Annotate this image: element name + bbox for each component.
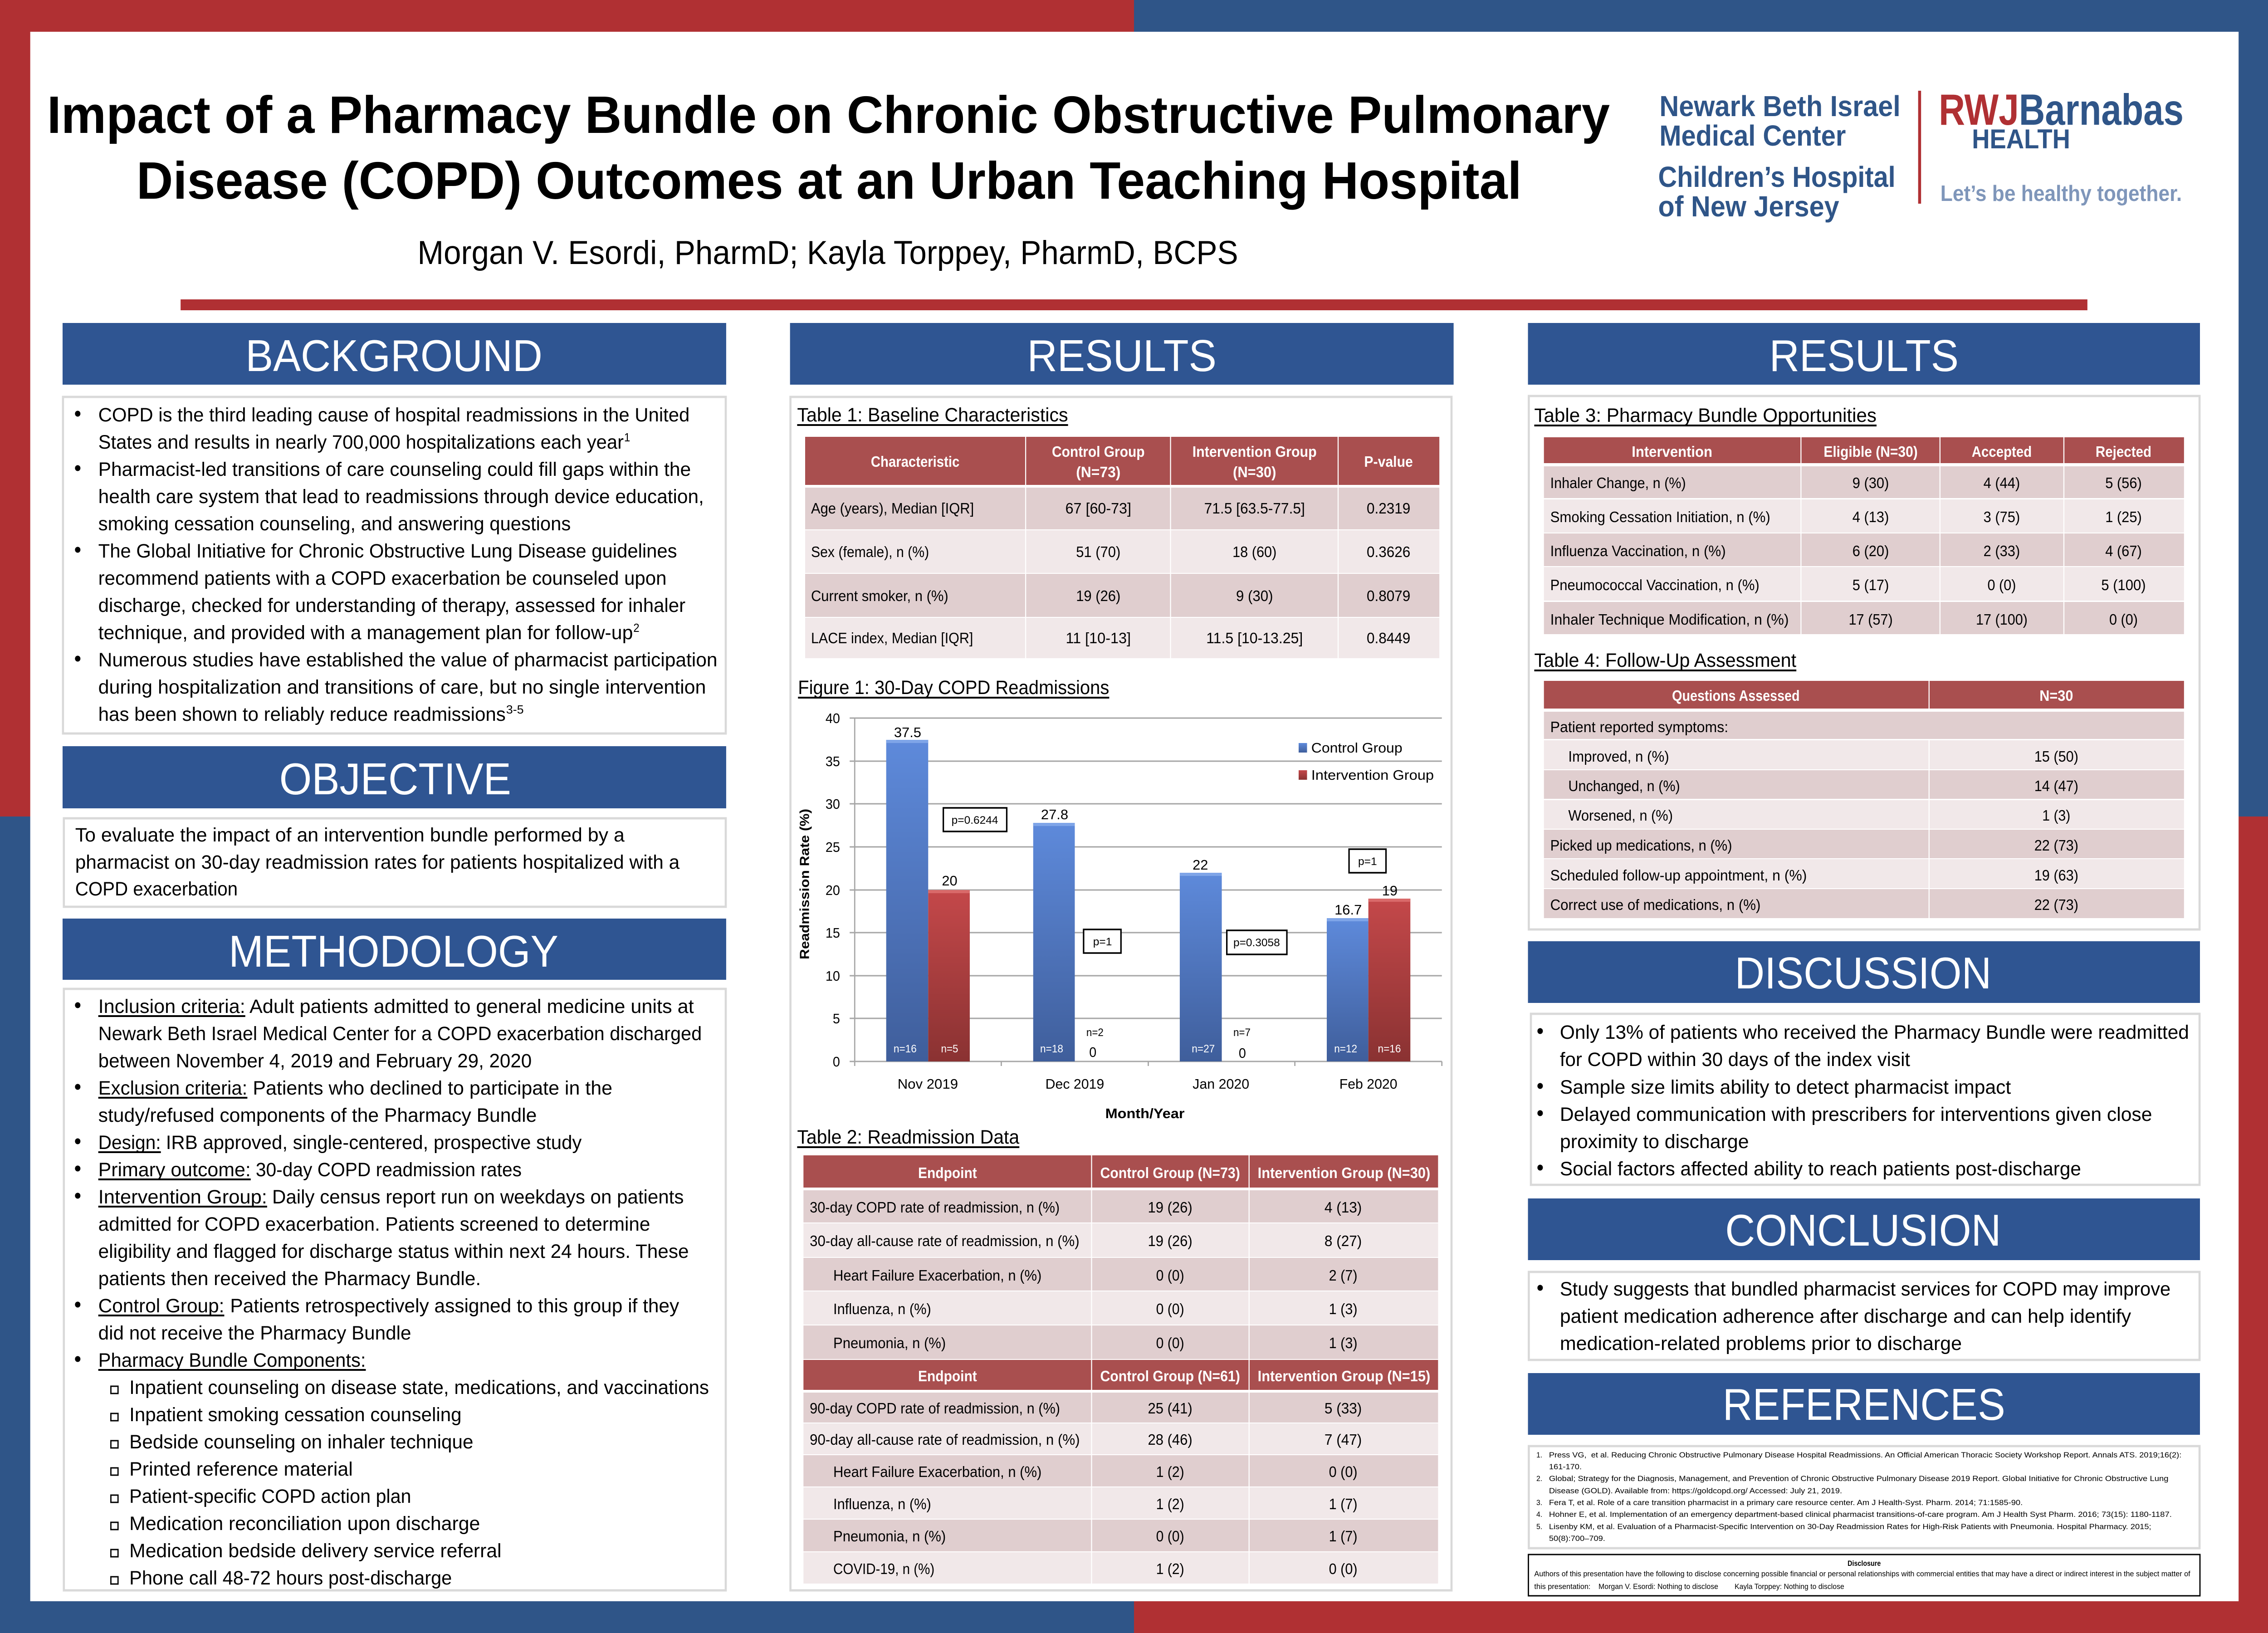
table 2: readmission data: Endpoint [918,1368,977,1384]
table 2: readmission data: 19 (26) [1148,1199,1193,1216]
panel: background: discharge, checked for understanding of therapy, assessed for inhaler [98,594,685,616]
panel: discussion: for COPD within 30 days of the index visit [1560,1048,1911,1070]
panel: references: Fera T, et al. Role of a care transition pharmacist in a primary care resource center. Am J Health-Syst. Pharm. 2014; 71:1585-90. [1549,1498,2023,1507]
p-value callouts [943,808,1386,954]
table 2: readmission data: 1 (2) [1156,1560,1184,1577]
panel: conclusion: patient medication adherence after discharge and can help identify [1560,1305,2131,1327]
p-value callouts: p=0.6244 [952,814,998,826]
y-axis tick labels [826,711,840,1070]
sub-list: pharmacy bundle components: Medication bedside delivery service referral [129,1540,502,1561]
panel: references: 161-170. [1549,1462,1582,1471]
y-axis title: Readmission Rate (%) [797,809,812,959]
logo: RWJBarnabas Health: HEALTH [1972,124,2070,154]
panel: methodology: study/refused components of the Pharmacy Bundle [98,1104,537,1126]
table 2: readmission data: 4 (13) [1325,1199,1362,1216]
heading: background [63,323,726,385]
table 3: pharmacy bundle opportunities: 17 (57) [1848,611,1893,628]
panel: references: 1. [1536,1451,1542,1459]
title [47,85,1610,210]
figure 1 heading: Figure 1: 30-Day COPD Readmissions [798,676,1109,698]
y-axis tick labels: 30 [826,797,840,812]
bars: Dec 2019: 27.8 [1041,807,1068,822]
table 4: follow-up assessment: 22 (73) [2034,837,2078,854]
heading: references [1528,1373,2200,1435]
panel: background: States and results in nearly 700,000 hospitalizations each year [98,431,624,453]
table 1: baseline characteristics: 0.2319 [1367,500,1410,517]
table 1: baseline characteristics: 51 (70) [1076,543,1120,560]
table 3: pharmacy bundle opportunities: 4 (13) [1853,508,1889,525]
table 1: baseline characteristics: 11.5 [10-13.25] [1206,630,1303,646]
heading: methodology: METHODOLOGY [229,927,558,977]
bars: Nov 2019 [886,725,970,1061]
table 2: readmission data: 90-day all-cause rate of readmission, n (%) [810,1431,1080,1448]
sub-list: pharmacy bundle components: Inpatient counseling on disease state, medications, and vaccinations [129,1376,709,1398]
table 4: follow-up assessment: N=30 [2039,687,2073,704]
table 1: baseline characteristics: 0.8079 [1367,587,1410,604]
table 2: readmission data: Endpoint [918,1164,977,1181]
panel: references: Lisenby KM, et al. Evaluation of a Pharmacist-Specific Intervention on 30-Day Readmission Rates for High-Risk Patients with Pneumonia. Hospital Pharmacy. 2015; [1549,1522,2151,1531]
table 3: pharmacy bundle opportunities: Rejected [2096,443,2151,460]
panel: methodology: Patients who declined to participate in the [253,1077,612,1099]
table 4: follow-up assessment [1544,681,2184,918]
panel: background: health care system that lead to readmissions through device education, [98,485,704,507]
x-axis category labels: Jan 2020 [1193,1076,1249,1092]
heading: methodology [63,919,726,980]
heading: results (middle column): RESULTS [1027,332,1217,381]
panel: methodology: Primary outcome: [98,1159,251,1180]
legend [1299,740,1434,783]
disclosure box [1528,1555,2200,1596]
table 2: readmission data: 1 (2) [1156,1463,1184,1480]
table 4: follow-up assessment: 19 (63) [2034,867,2078,884]
p-value callouts: p=1 [1358,855,1377,867]
bars: Jan 2020: n=7 [1233,1026,1251,1038]
table 2: readmission data [803,1155,1438,1584]
sub-list: pharmacy bundle components: Phone call 48-72 hours post-discharge [129,1567,452,1589]
table 1: baseline characteristics: Characteristic [871,453,959,470]
panel: methodology [64,989,726,1590]
panel: objective: pharmacist on 30-day readmission rates for patients hospitalized with a [75,851,680,873]
panel: background: Pharmacist-led transitions of care counseling could fill gaps within the [98,458,691,480]
table 3: pharmacy bundle opportunities: 0 (0) [2109,611,2138,628]
table 2: readmission data: 1 (3) [1329,1335,1358,1351]
logo divider [1918,91,1921,204]
table 1: baseline characteristics: 18 (60) [1232,543,1276,560]
table 2: readmission data: COVID-19, n (%) [833,1560,934,1577]
panel: background: Numerous studies have established the value of pharmacist participation [98,649,717,670]
bars: Nov 2019: n=16 [894,1042,917,1055]
bars: Dec 2019: n=18 [1040,1042,1063,1055]
table 2: readmission data: Heart Failure Exacerbation, n (%) [833,1267,1041,1284]
table 1: baseline characteristics: (N=30) [1233,464,1276,480]
heading: conclusion [1528,1198,2200,1260]
table 2: readmission data: Heart Failure Exacerbation, n (%) [833,1463,1041,1480]
panel: references: Press VG, et al. Reducing Chronic Obstructive Pulmonary Disease Hospital Readmissions. An Official American Thoracic Society Workshop Report. Annals ATS. 2019;16(2): [1549,1451,2181,1459]
y-axis tick labels: 0 [833,1054,840,1070]
sub-list: pharmacy bundle components: Printed reference material [129,1458,353,1480]
disclosure box: Authors of this presentation have the following to disclose concerning possible financial or personal relationships with commercial entities that may have a direct or indirect interest in the subject matter of [1534,1569,2190,1578]
table 1: baseline characteristics: (N=73) [1076,464,1120,480]
table 2: readmission data: 0 (0) [1156,1267,1184,1284]
table 3: pharmacy bundle opportunities: 4 (44) [1984,474,2020,491]
panel: references: 4. [1536,1510,1542,1519]
table 3: pharmacy bundle opportunities: 4 (67) [2105,543,2142,559]
table 4: follow-up assessment: Worsened, n (%) [1568,807,1673,824]
bars: Nov 2019: 37.5 [894,725,921,740]
panel: discussion: Social factors affected ability to reach patients post-discharge [1560,1158,2081,1179]
p-value callouts: p=0.3058 [1233,936,1280,949]
panel: discussion: proximity to discharge [1560,1130,1749,1152]
table 2: readmission data: Pneumonia, n (%) [833,1528,946,1545]
table 3: pharmacy bundle opportunities: Inhaler Change, n (%) [1550,474,1686,491]
panel: references: 50(8):700–709. [1549,1534,1605,1543]
table 2: readmission data: Influenza, n (%) [833,1301,931,1317]
table 2: readmission data: 0 (0) [1156,1528,1184,1545]
panel: background: has been shown to reliably reduce readmissions [98,703,506,725]
table 3 heading: Table 3: Pharmacy Bundle Opportunities [1534,404,1877,426]
bars: Dec 2019 [1033,807,1104,1061]
table 4: follow-up assessment: 14 (47) [2034,777,2078,794]
table 1: baseline characteristics: Current smoker, n (%) [811,587,948,604]
table 2: readmission data: 1 (7) [1329,1528,1358,1545]
legend: Intervention Group [1311,768,1434,783]
table 2: readmission data: Control Group (N=61) [1100,1368,1240,1384]
panel: results middle column [791,397,1452,1590]
panel: methodology: Exclusion criteria: [98,1077,247,1099]
bars: Feb 2020: 19 [1382,883,1398,899]
table 3: pharmacy bundle opportunities: 0 (0) [1987,577,2016,593]
panel: methodology: patients then received the Pharmacy Bundle. [98,1267,481,1289]
table 3: pharmacy bundle opportunities: Smoking Cessation Initiation, n (%) [1550,508,1770,525]
table 2: readmission data: 1 (7) [1329,1496,1358,1512]
bars: Jan 2020: 0 [1239,1046,1246,1061]
bars: Nov 2019: 20 [942,873,958,889]
table 4: follow-up assessment: 1 (3) [2042,807,2070,824]
panel: methodology: eligibility and flagged for discharge status within next 24 hours. These [98,1240,689,1262]
bars: Dec 2019: n=2 [1086,1026,1104,1038]
disclosure box: Morgan V. Esordi: Nothing to disclose [1598,1582,1718,1591]
legend: Control Group [1311,740,1403,756]
table 2: readmission data: 1 (3) [1329,1301,1358,1317]
title divider bar [181,299,2087,310]
logo: Newark Beth Israel and Children's Hospital: Newark Beth Israel [1659,90,1901,123]
sub-list: pharmacy bundle components: Inpatient smoking cessation counseling [129,1403,462,1425]
table 3: pharmacy bundle opportunities: 2 (33) [1984,543,2020,559]
table 3: pharmacy bundle opportunities: Influenza Vaccination, n (%) [1550,543,1726,559]
bars: Feb 2020: 16.7 [1334,902,1362,918]
heading: objective [63,746,726,808]
panel: background: 2 [633,621,640,635]
table 2: readmission data: 0 (0) [1156,1301,1184,1317]
table 3: pharmacy bundle opportunities: 3 (75) [1984,508,2020,525]
disclosure box: Disclosure [1848,1559,1881,1568]
panel: references: Global; Strategy for the Diagnosis, Management, and Prevention of Chronic Obstructive Pulmonary Disease 2019 Report. Global Initiative for Chronic Obstructive Lung [1549,1474,2169,1483]
table 1: baseline characteristics: 67 [60-73] [1066,500,1131,517]
table 3: pharmacy bundle opportunities: Intervention [1632,443,1712,460]
table 2: readmission data: 19 (26) [1148,1232,1193,1249]
panel: background: during hospitalization and transitions of care, but no single intervention [98,676,706,698]
x-axis category labels: Nov 2019 [898,1076,958,1092]
table 3: pharmacy bundle opportunities: 1 (25) [2105,508,2142,525]
table 2: readmission data: 90-day COPD rate of readmission, n (%) [810,1400,1060,1417]
sub-list: pharmacy bundle components [111,1376,709,1589]
table 3: pharmacy bundle opportunities: Eligible (N=30) [1823,443,1918,460]
panel: background [63,397,726,733]
panel: methodology: did not receive the Pharmacy Bundle [98,1322,411,1344]
panel: objective [64,818,726,907]
table 1: baseline characteristics: 11 [10-13] [1066,630,1131,646]
logo: Newark Beth Israel and Children's Hospital: Medical Center [1659,120,1846,152]
disclosure box: Kayla Torppey: Nothing to disclose [1735,1582,1844,1591]
panel: methodology: Adult patients admitted to general medicine units at [249,995,694,1017]
table 4: follow-up assessment: 15 (50) [2034,748,2078,765]
table 3: pharmacy bundle opportunities: Accepted [1972,443,2032,460]
table 1: baseline characteristics: 9 (30) [1236,587,1273,604]
panel: methodology: Inclusion criteria: [98,995,245,1017]
table 3: pharmacy bundle opportunities: Pneumococcal Vaccination, n (%) [1550,577,1760,593]
table 2: readmission data: Control Group (N=73) [1100,1164,1240,1181]
heading: discussion: DISCUSSION [1735,949,1991,998]
bars: Feb 2020: n=16 [1378,1042,1401,1055]
panel: background: The Global Initiative for Chronic Obstructive Lung Disease guidelines [98,540,677,562]
panel: methodology: admitted for COPD exacerbation. Patients screened to determine [98,1213,650,1235]
panel: discussion: Only 13% of patients who received the Pharmacy Bundle were readmitted [1560,1021,2189,1043]
logo: RWJBarnabas Health: Let’s be healthy together. [1941,181,2182,206]
authors: Morgan V. Esordi, PharmD; Kayla Torppey, PharmD, BCPS [417,234,1238,271]
table 2: readmission data: 25 (41) [1148,1400,1193,1417]
panel: methodology: Pharmacy Bundle Components: [98,1349,366,1371]
table 2: readmission data: 0 (0) [1329,1560,1358,1577]
table 2: readmission data: 0 (0) [1156,1335,1184,1351]
sub-list: pharmacy bundle components: Patient-specific COPD action plan [129,1485,411,1507]
heading: conclusion: CONCLUSION [1725,1206,2001,1256]
table 4 heading: Table 4: Follow-Up Assessment [1534,649,1797,671]
table 3: pharmacy bundle opportunities [1544,437,2184,634]
panel: background: recommend patients with a COPD exacerbation be counseled upon [98,567,666,589]
y-axis tick labels: 5 [833,1011,840,1027]
y-axis tick labels: 35 [826,754,840,769]
table 3: pharmacy bundle opportunities: 9 (30) [1853,474,1889,491]
heading: discussion [1528,941,2200,1003]
panel: methodology: Patients retrospectively assigned to this group if they [230,1295,679,1316]
table 2: readmission data: 7 (47) [1325,1431,1362,1448]
panel: methodology: IRB approved, single-centered, prospective study [166,1131,582,1153]
table 1: baseline characteristics: Age (years), Median [IQR] [811,500,974,517]
x-axis category labels: Dec 2019 [1046,1076,1104,1092]
panel: methodology: Daily census report run on weekdays on patients [272,1186,684,1208]
table 1: baseline characteristics: 19 (26) [1076,587,1120,604]
x-axis category labels: Feb 2020 [1339,1076,1398,1092]
table 2: readmission data: 8 (27) [1325,1232,1362,1249]
table 3: pharmacy bundle opportunities: 17 (100) [1976,611,2028,628]
logo: RWJBarnabas Health [1939,85,2184,206]
table 2: readmission data: 2 (7) [1329,1267,1358,1284]
panel: methodology: Design: [98,1131,161,1153]
heading: background: BACKGROUND [245,332,543,381]
heading: results (middle column) [790,323,1454,385]
sub-list: pharmacy bundle components: Medication reconciliation upon discharge [129,1512,480,1534]
heading: results (right column): RESULTS [1769,332,1959,381]
table 1: baseline characteristics [805,437,1439,658]
panel: discussion: Delayed communication with prescribers for interventions given close [1560,1103,2152,1125]
table 4: follow-up assessment: Improved, n (%) [1568,748,1669,765]
panel: references: 2. [1536,1474,1542,1483]
y-axis tick labels: 15 [826,925,840,941]
table 2: readmission data: Intervention Group (N=15) [1258,1368,1430,1384]
table 4: follow-up assessment: Questions Assessed [1672,687,1800,704]
table 2: readmission data: 0 (0) [1329,1463,1358,1480]
panel: conclusion [1529,1272,2200,1360]
bar chart: 30-day COPD readmissions [797,711,1442,1121]
p-value callouts: p=1 [1093,935,1112,948]
panel: conclusion: Study suggests that bundled pharmacist services for COPD may improve [1560,1278,2170,1300]
panel: discussion: Sample size limits ability to detect pharmacist impact [1560,1076,2011,1098]
bars: Nov 2019: n=5 [941,1042,958,1055]
disclosure box: this presentation: [1534,1582,1590,1591]
panel: references: Hohner E, et al. Implementation of an emergency department-based clinical pharmacist transitions-of-care program. Am J Health Syst Pharm. 2016; 73(15): 1180-1187. [1549,1510,2172,1519]
logo: RWJBarnabas Health: Barnabas [2019,85,2184,134]
panel: references: 5. [1536,1522,1542,1531]
logo: RWJBarnabas Health: RWJ [1939,85,2019,134]
panel: objective: To evaluate the impact of an intervention bundle performed by a [75,824,625,846]
panel: objective: COPD exacerbation [75,878,238,900]
panel: methodology: 30-day COPD readmission rates [256,1159,522,1180]
panel: methodology: between November 4, 2019 and February 29, 2020 [98,1050,532,1071]
table 1: baseline characteristics: Sex (female), n (%) [811,543,929,560]
y-axis tick labels: 10 [826,968,840,984]
panel: background: technique, and provided with a management plan for follow-up [98,621,633,643]
table 4: follow-up assessment: 22 (73) [2034,896,2078,913]
table 2: readmission data: 30-day COPD rate of readmission, n (%) [810,1199,1060,1216]
table 2: readmission data: 5 (33) [1325,1400,1362,1417]
title: Disease (COPD) Outcomes at an Urban Teaching Hospital [137,151,1522,210]
heading: results (right column) [1528,323,2200,385]
panel: conclusion: medication-related problems prior to discharge [1560,1332,1962,1354]
sub-list: pharmacy bundle components: Bedside counseling on inhaler technique [129,1431,474,1452]
x-axis title: Month/Year [1105,1106,1185,1121]
table 2: readmission data: Intervention Group (N=30) [1258,1164,1430,1181]
table 1: baseline characteristics: 0.3626 [1367,543,1410,560]
table 1: baseline characteristics: 71.5 [63.5-77.5] [1204,500,1305,517]
panel: background: 3-5 [506,703,524,716]
bars: Feb 2020 [1327,883,1410,1061]
y-axis tick labels: 25 [826,840,840,855]
panel: references: Disease (GOLD). Available from: https://goldcopd.org/ Accessed: July 21, 2019. [1549,1486,1842,1495]
table 4: follow-up assessment: Patient reported symptoms: [1550,719,1728,735]
table 2: readmission data: Influenza, n (%) [833,1496,931,1512]
logo: Newark Beth Israel and Children's Hospital [1658,90,1901,223]
table 2: readmission data: 28 (46) [1148,1431,1193,1448]
panel: methodology: Newark Beth Israel Medical Center for a COPD exacerbation discharged [98,1022,702,1044]
bars: Jan 2020: n=27 [1192,1042,1215,1055]
table 1: baseline characteristics: LACE index, Median [IQR] [811,630,973,646]
logo: Newark Beth Israel and Children's Hospital: Children’s Hospital [1658,161,1896,194]
title: Impact of a Pharmacy Bundle on Chronic Obstructive Pulmonary [47,85,1610,144]
table 3: pharmacy bundle opportunities: 6 (20) [1853,543,1889,559]
panel: background: smoking cessation counseling, and answering questions [98,513,571,534]
table 2: readmission data: Pneumonia, n (%) [833,1335,946,1351]
table 3: pharmacy bundle opportunities: 5 (56) [2105,474,2142,491]
table 4: follow-up assessment: Correct use of medications, n (%) [1550,896,1760,913]
panel: references [1529,1446,2200,1548]
table 1: baseline characteristics: Control Group [1052,443,1145,460]
panel: background: COPD is the third leading cause of hospital readmissions in the United [98,404,689,425]
table 1: baseline characteristics: P-value [1364,453,1413,470]
bars: Jan 2020 [1180,857,1251,1061]
bars: Feb 2020: n=12 [1334,1042,1357,1055]
bars: Jan 2020: 22 [1193,857,1208,873]
panel: discussion [1531,1014,2200,1185]
panel: results right column [1529,396,2200,929]
y-axis tick labels: 20 [826,883,840,898]
table 2: readmission data: 30-day all-cause rate of readmission, n (%) [810,1232,1080,1249]
x-axis category labels [898,1076,1398,1092]
table 4: follow-up assessment: Scheduled follow-up appointment, n (%) [1550,867,1807,884]
y-axis tick labels: 40 [826,711,840,726]
table 3: pharmacy bundle opportunities: 5 (100) [2101,577,2146,593]
table 4: follow-up assessment: Picked up medications, n (%) [1550,837,1732,854]
heading: objective: OBJECTIVE [279,755,511,804]
table 1: baseline characteristics: Intervention Group [1193,443,1317,460]
table 1 heading: Table 1: Baseline Characteristics [797,404,1068,425]
panel: methodology: Control Group: [98,1295,224,1316]
table 3: pharmacy bundle opportunities: 5 (17) [1853,577,1889,593]
table 2 heading: Table 2: Readmission Data [797,1126,1020,1148]
table 4: follow-up assessment: Unchanged, n (%) [1568,777,1680,794]
table 1: baseline characteristics: 0.8449 [1367,630,1410,646]
panel: references: 3. [1536,1498,1542,1507]
heading: references: REFERENCES [1723,1380,2005,1430]
table 2: readmission data: 1 (2) [1156,1496,1184,1512]
panel: background: 1 [624,431,630,444]
logo: Newark Beth Israel and Children's Hospital: of New Jersey [1658,191,1839,223]
panel: methodology: Intervention Group: [98,1186,267,1208]
bars: Dec 2019: 0 [1089,1045,1096,1060]
table 3: pharmacy bundle opportunities: Inhaler Technique Modification, n (%) [1550,611,1789,628]
